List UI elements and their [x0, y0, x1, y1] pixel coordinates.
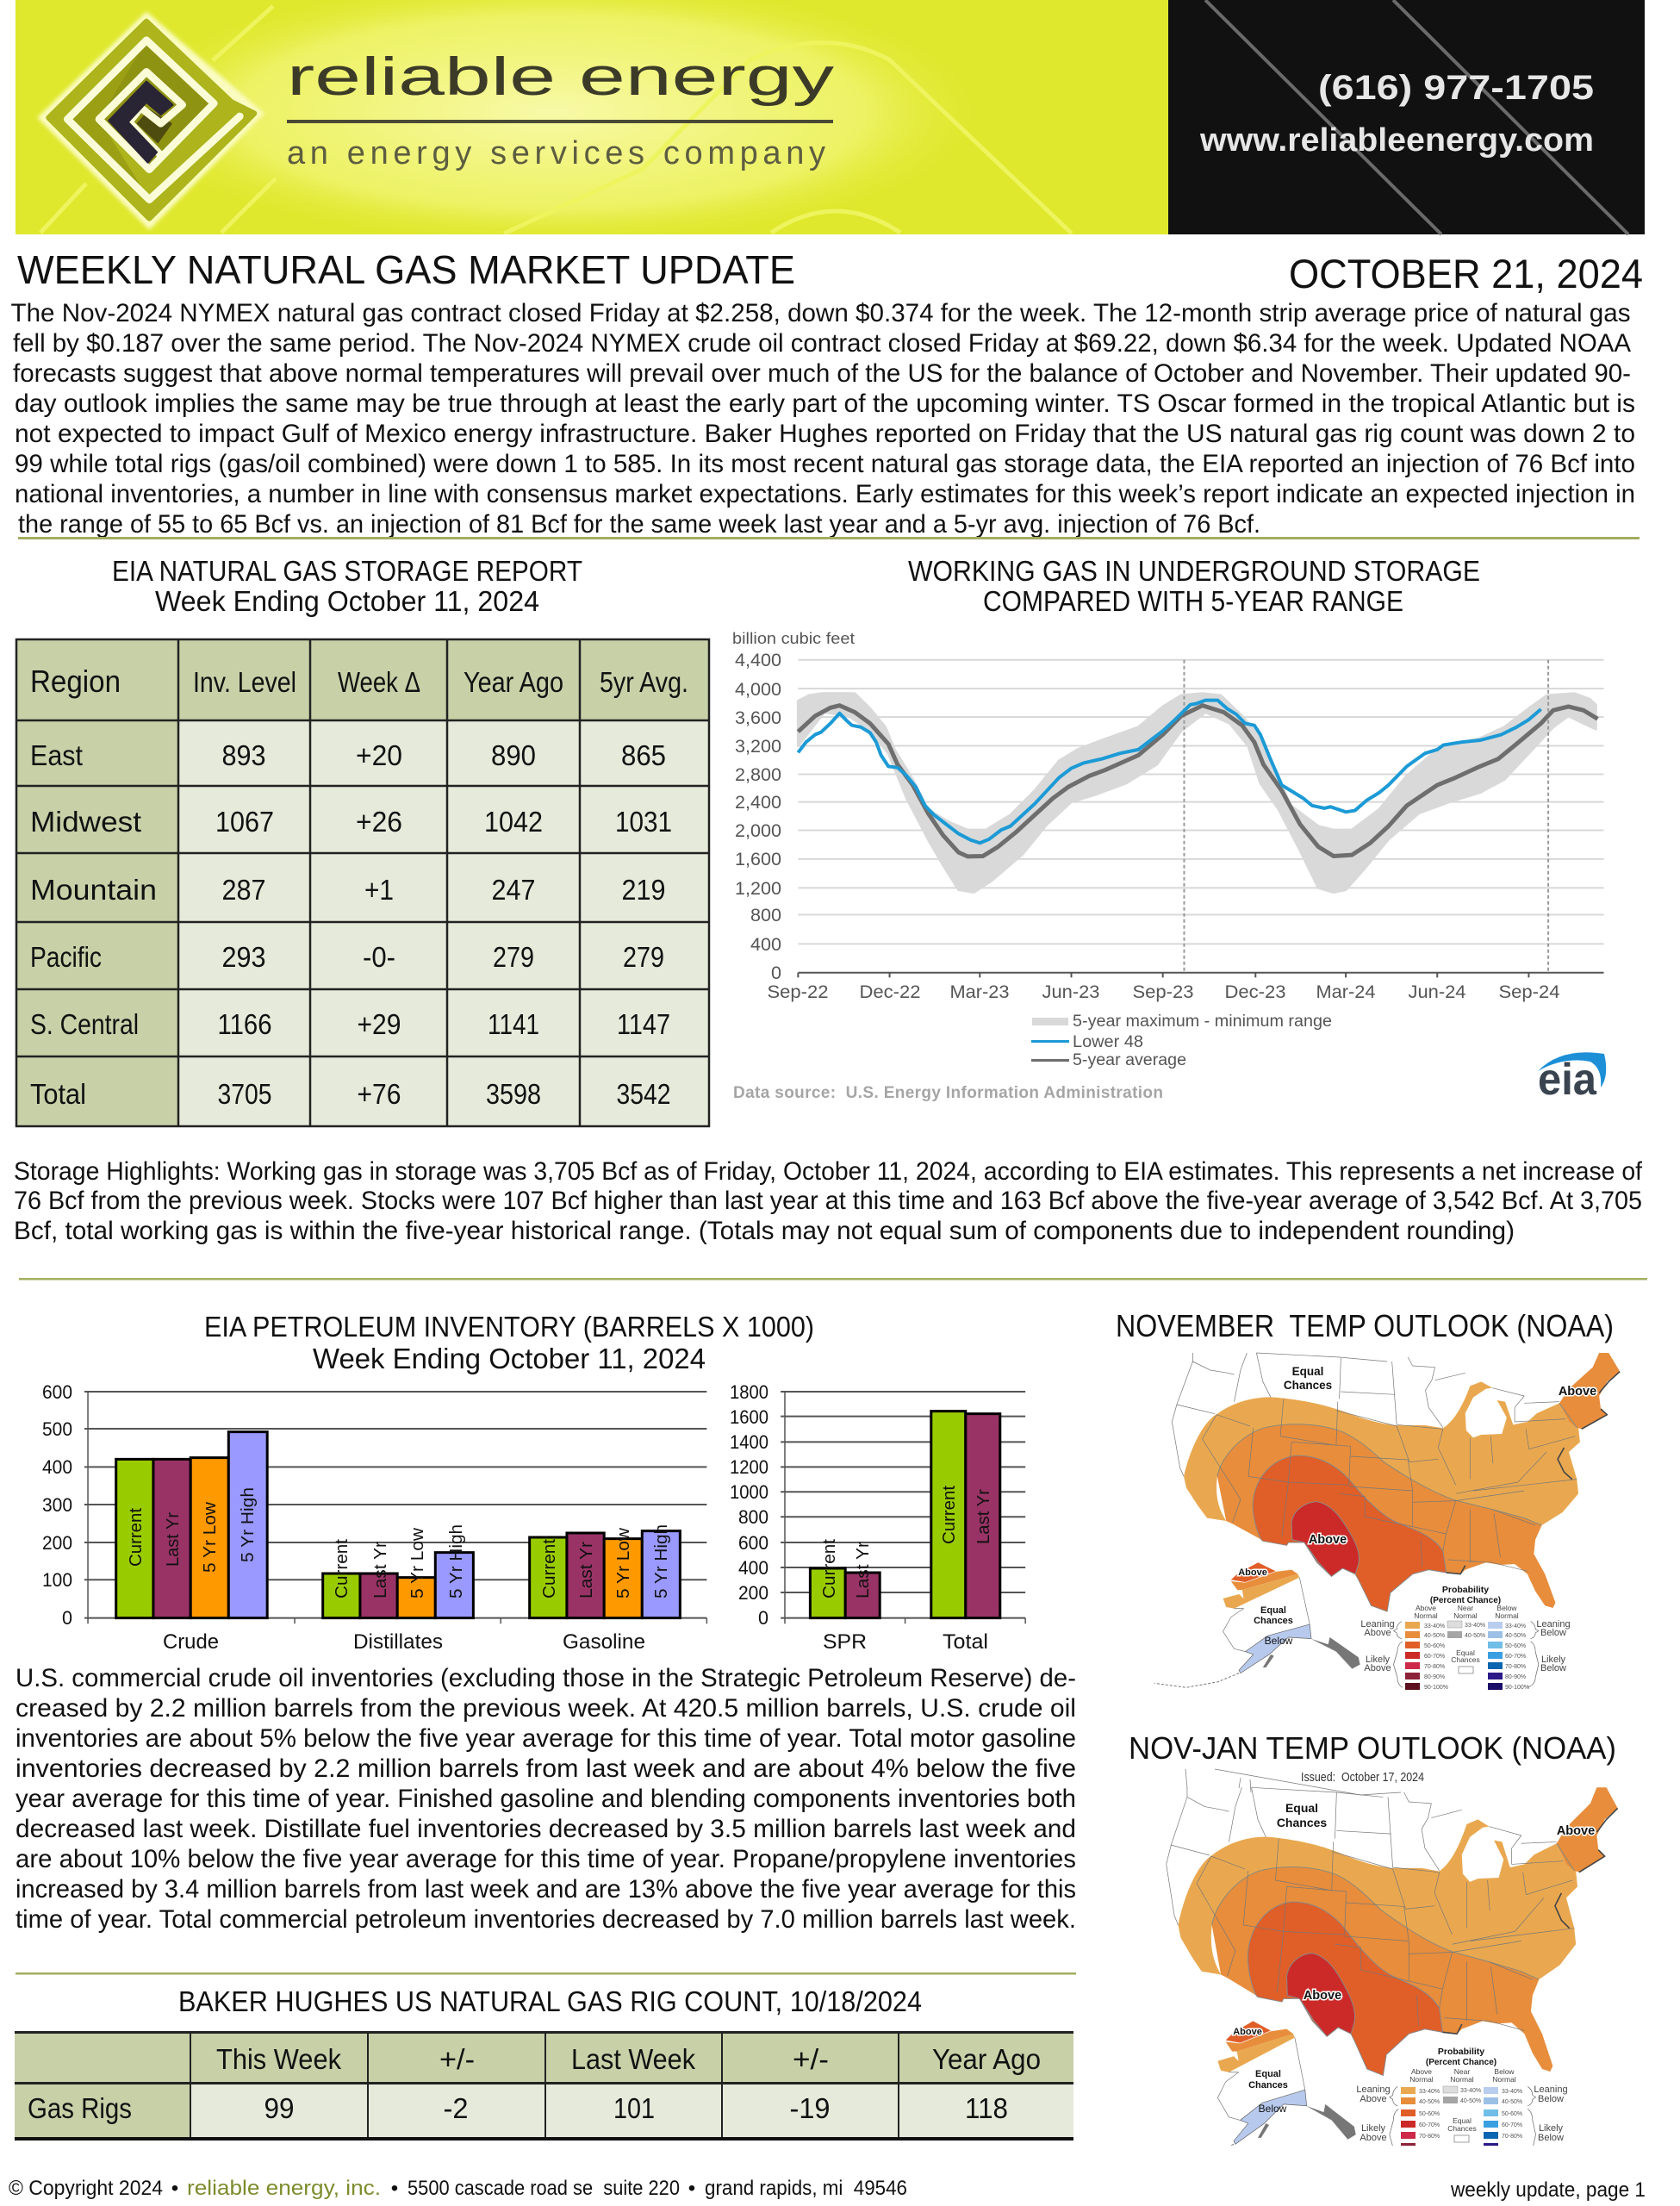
petroleum inventory heading: EIA PETROLEUM INVENTORY (BARRELS X 1000)	[204, 1311, 814, 1343]
map labels: Equal	[1255, 2069, 1281, 2079]
row: East: +20	[356, 739, 402, 771]
row: Pacific: -0-	[363, 941, 395, 973]
website: www.reliableenergy.com	[1199, 122, 1594, 159]
map legend: 50-60%	[1505, 1643, 1526, 1649]
chart x-axis labels: Jun-23	[1042, 982, 1099, 1002]
footer address line: •	[171, 2177, 178, 2200]
issue date: Issued: October 17, 2024	[1301, 1770, 1424, 1785]
petroleum commentary paragraph: creased by 2.2 million barrels from the previous week. At 420.5 million barrels, U.S. crude oil	[16, 1694, 1076, 1723]
market summary paragraph: 99 while total rigs (gas/oil combined) were down 1 to 585. In its most recent natural gas storage data, the EIA reported an injection of 76 Bcf into	[15, 450, 1635, 478]
map labels: Equal	[1260, 1605, 1286, 1616]
footer address line: 5500 cascade road se suite 220	[408, 2177, 680, 2200]
market summary paragraph: The Nov-2024 NYMEX natural gas contract closed Friday at $2.258, down $0.374 for the week. The 12-month strip average price of natural gas	[10, 299, 1630, 327]
chart y-axis unit: billion cubic feet	[732, 630, 855, 647]
chart legend: 5-year average	[1073, 1051, 1186, 1069]
rig count table	[15, 2031, 1073, 2141]
chart y-axis labels: 0	[771, 963, 781, 983]
map legend: 40-50%	[1465, 1633, 1485, 1639]
category labels: Crude	[163, 1630, 219, 1654]
chart y-axis labels: 1,200	[735, 879, 781, 899]
rotated bar labels: Current	[333, 1539, 352, 1598]
map legend: Normal	[1492, 2075, 1516, 2084]
map legend: Equal	[1453, 2116, 1472, 2125]
right chart y-axis labels: 600	[738, 1532, 768, 1554]
map legend: Normal	[1409, 2075, 1434, 2084]
chart legend: Lower 48	[1073, 1033, 1143, 1051]
left chart y-axis labels: 500	[42, 1418, 72, 1440]
rotated bar labels: Last Yr	[164, 1512, 183, 1567]
table header row: Year Ago	[464, 666, 563, 698]
table header row: Inv. Level	[193, 666, 296, 698]
map legend: 33-40%	[1465, 1623, 1485, 1629]
black contact panel	[1168, 0, 1645, 234]
rig table header: This Week	[216, 2043, 341, 2075]
yellow banner background	[16, 0, 1168, 234]
storage table	[16, 639, 709, 1126]
map legend: Likely	[1366, 1654, 1391, 1665]
row: Pacific	[30, 941, 664, 973]
map legend: 70-80%	[1424, 1664, 1445, 1670]
chart y-axis labels: 4,400	[735, 651, 781, 670]
main title: WEEKLY NATURAL GAS MARKET UPDATE	[17, 247, 795, 292]
map legend: 50-60%	[1424, 1643, 1445, 1649]
rotated bar labels: 5 Yr Low	[614, 1527, 633, 1598]
right chart y-axis labels: 1000	[730, 1481, 768, 1503]
storage highlights paragraph: 76 Bcf from the previous week. Stocks were 107 Bcf higher than last year at this time and 163 Bcf above the five-year average of 3,542 Bcf. At 3,705	[14, 1187, 1642, 1215]
map legend: Likely	[1361, 2123, 1386, 2134]
map legend: Probability	[1442, 1585, 1489, 1595]
row: Mountain: Mountain	[30, 874, 157, 906]
storage highlights paragraph	[14, 1157, 1643, 1245]
left chart y-axis labels: 400	[42, 1456, 72, 1478]
row: East: 893	[222, 739, 265, 771]
map legend: 33-40%	[1424, 1623, 1445, 1630]
November outlook map	[1154, 1353, 1620, 1691]
row: Total: 3705	[217, 1078, 272, 1110]
tagline: an energy services company	[287, 135, 825, 171]
right chart y-axis labels: 1800	[730, 1381, 768, 1403]
row: S. Central: 1141	[488, 1008, 539, 1040]
map labels: Chances	[1284, 1379, 1332, 1392]
left chart y-axis labels: 0	[62, 1607, 72, 1629]
rotated bar labels	[820, 1486, 993, 1598]
table header row: Region	[30, 664, 121, 699]
row: Mountain: 219	[622, 874, 665, 906]
map legend: Below	[1540, 1628, 1566, 1638]
map legend: Normal	[1453, 1611, 1478, 1620]
map legend: Below	[1496, 1604, 1517, 1612]
map legend: 70-80%	[1505, 1664, 1526, 1670]
left chart y-axis labels: 300	[42, 1494, 72, 1516]
map labels: Above	[1557, 1824, 1595, 1838]
chart y-axis labels	[735, 651, 781, 983]
distillates bars	[323, 1553, 473, 1618]
petroleum commentary paragraph: U.S. commercial crude oil inventories (excluding those in the Strategic Petroleum Reserve) de-	[16, 1664, 1076, 1692]
petroleum commentary paragraph	[16, 1664, 1076, 1934]
map legend: Probability	[1438, 2047, 1484, 2057]
row: Total: +76	[357, 1078, 401, 1110]
row: East	[30, 739, 666, 771]
row: Pacific: 279	[623, 941, 664, 973]
chart y-axis labels: 4,000	[735, 680, 781, 700]
row: Midwest: 1042	[484, 806, 543, 838]
rig table data row: 101	[613, 2092, 655, 2124]
map legend: 50-60%	[1502, 2111, 1522, 2117]
chart x-axis labels: Dec-22	[860, 982, 920, 1002]
row: Total	[30, 1078, 670, 1110]
storage highlights paragraph: Bcf, total working gas is within the five-year historical range. (Totals may not equal sum of components due to independent rounding)	[14, 1217, 1515, 1245]
chart y-axis labels: 1,600	[735, 850, 781, 869]
category labels: Distillates	[353, 1630, 443, 1654]
left chart y-axis labels	[42, 1381, 72, 1629]
rotated bar labels: Last Yr	[577, 1542, 596, 1598]
map legend: 50-60%	[1419, 2111, 1440, 2117]
gasoline bars	[530, 1531, 680, 1618]
map legend: Near	[1454, 2067, 1470, 2076]
right chart y-axis labels: 200	[738, 1582, 768, 1604]
map legend: Likely	[1541, 1654, 1566, 1665]
rig table header	[216, 2043, 1041, 2075]
rotated bar labels: Last Yr	[974, 1489, 993, 1544]
petroleum commentary paragraph: inventories decreased by 2.2 million barrels from last week and are about 4% below the five	[16, 1754, 1076, 1783]
row: Pacific: Pacific	[30, 941, 102, 973]
footer address line	[9, 2177, 907, 2200]
category labels: Gasoline	[563, 1630, 645, 1654]
market summary paragraph: the range of 55 to 65 Bcf vs. an injection of 81 Bcf for the same week last year and a 5-yr avg. injection of 76 Bcf.	[18, 510, 1260, 539]
map legend: Above	[1416, 1604, 1436, 1612]
left chart y-axis labels: 600	[42, 1381, 72, 1403]
map legend: 70-80%	[1502, 2134, 1522, 2140]
working gas chart heading	[908, 555, 1480, 617]
map legend: 40-50%	[1419, 2099, 1440, 2105]
map legend: Above	[1364, 1663, 1391, 1673]
map legend	[1360, 1585, 1571, 1691]
Nov-Jan outlook map	[1148, 1769, 1618, 2160]
map legend: Leaning	[1356, 2084, 1391, 2095]
map labels: Above	[1238, 1567, 1267, 1578]
right chart y-axis labels	[730, 1381, 768, 1629]
icon: eia logo: eia	[1538, 1055, 1597, 1105]
row: Midwest: Midwest	[30, 806, 141, 838]
left chart y-axis labels: 100	[42, 1569, 72, 1591]
map legend: 33-40%	[1502, 2089, 1522, 2095]
banner glow	[40, 0, 1072, 250]
chart y-axis labels: 2,400	[735, 793, 781, 813]
row: S. Central: 1147	[617, 1008, 670, 1040]
petroleum bar chart: crude, distillates, gasoline	[42, 1381, 706, 1654]
table header row: 5yr Avg.	[600, 666, 688, 698]
right chart y-axis labels: 800	[738, 1506, 768, 1528]
map labels: Above	[1304, 1989, 1341, 2003]
map legend: 40-50%	[1424, 1633, 1445, 1639]
map legend: Above	[1360, 2094, 1387, 2104]
rotated bar labels	[127, 1487, 671, 1598]
rig count heading: BAKER HUGHES US NATURAL GAS RIG COUNT, 10/18/2024	[178, 1985, 922, 2017]
Nov-Jan outlook heading: NOV-JAN TEMP OUTLOOK (NOAA)	[1129, 1730, 1616, 1766]
map legend: Leaning	[1536, 1619, 1571, 1630]
map legend: 33-40%	[1460, 2088, 1481, 2094]
map legend: 90-100%	[1505, 1685, 1529, 1691]
footer address line: © Copyright 2024	[9, 2177, 163, 2200]
page number: weekly update, page 1	[1450, 2178, 1646, 2202]
right chart y-axis labels: 0	[758, 1607, 768, 1629]
chart y-axis labels: 2,000	[735, 821, 781, 841]
chart y-axis labels: 800	[750, 906, 781, 925]
footer address line: grand rapids, mi 49546	[705, 2177, 907, 2200]
row: Mountain: 287	[222, 874, 265, 906]
storage report heading: EIA NATURAL GAS STORAGE REPORT	[112, 555, 582, 587]
storage report heading: Week Ending October 11, 2024	[155, 585, 539, 617]
phone number: (616) 977-1705	[1318, 69, 1594, 107]
map legend: Leaning	[1360, 1619, 1395, 1630]
rig table header: +/-	[439, 2043, 475, 2075]
map legend: 33-40%	[1419, 2089, 1440, 2095]
petroleum commentary paragraph: decreased last week. Distillate fuel inventories decreased by 3.5 million barrels last week and	[16, 1815, 1076, 1843]
storage report heading	[112, 555, 582, 617]
rig table header: Year Ago	[932, 2043, 1041, 2075]
row: Midwest: +26	[356, 806, 402, 838]
date: OCTOBER 21, 2024	[1289, 251, 1643, 296]
rotated bar labels: 5 Yr Low	[408, 1527, 427, 1598]
chart x-axis labels	[767, 982, 1560, 1002]
row: East: 890	[491, 739, 536, 771]
map shapes	[1154, 1353, 1620, 1687]
petroleum commentary paragraph: year average for this time of year. Finished gasoline and blending components inventories both	[16, 1785, 1076, 1813]
row: Midwest	[30, 806, 672, 838]
right chart y-axis labels: 1600	[730, 1406, 768, 1428]
map legend: 60-70%	[1419, 2122, 1440, 2128]
row: Midwest: 1031	[615, 806, 672, 838]
logo spiral diamond	[37, 11, 264, 230]
petroleum commentary paragraph: are about 10% below the five year average for this time of year. Propane/propylene inventories	[16, 1845, 1076, 1873]
map legend: 80-90%	[1505, 1674, 1526, 1680]
petroleum commentary paragraph: inventories are about 5% below the five year average for this time of year. Total motor gasoline	[16, 1724, 1076, 1753]
rotated bar labels: Current	[127, 1508, 146, 1567]
row: East: 865	[621, 739, 666, 771]
petroleum inventory heading: Week Ending October 11, 2024	[313, 1343, 706, 1374]
map legend: Above	[1364, 1628, 1391, 1638]
map legend: Above	[1411, 2067, 1432, 2076]
category labels	[823, 1630, 988, 1654]
working gas line chart	[732, 630, 1606, 1105]
rig table data row: 99	[264, 2092, 295, 2124]
map legend: Chances	[1447, 2124, 1477, 2133]
chart plot area	[798, 660, 1603, 977]
brand name: reliable energy	[287, 47, 834, 107]
row: Mountain	[30, 874, 665, 906]
map legend: Below	[1540, 1663, 1566, 1673]
map legend: Near	[1458, 1604, 1473, 1612]
row: Mountain: +1	[364, 874, 394, 906]
market summary paragraph: not expected to impact Gulf of Mexico energy infrastructure. Baker Hughes reported on Friday that the US natural gas rig count was down 2 to	[15, 420, 1635, 448]
map legend: 70-80%	[1419, 2134, 1440, 2140]
map labels: Above	[1559, 1385, 1596, 1399]
petroleum commentary paragraph: time of year. Total commercial petroleum inventories decreased by 7.0 million barrels last week.	[16, 1905, 1076, 1934]
row: S. Central: S. Central	[30, 1008, 139, 1040]
row: S. Central: 1166	[217, 1008, 272, 1040]
map legend: 80-90%	[1424, 1674, 1445, 1680]
petroleum bar chart: SPR and total	[730, 1381, 1025, 1654]
rotated bar labels: 5 Yr High	[447, 1524, 466, 1598]
chart y-axis labels: 3,600	[735, 708, 781, 728]
rig table data row: -19	[789, 2092, 831, 2124]
row: S. Central: +29	[357, 1008, 401, 1040]
chart x-axis labels: Mar-24	[1316, 982, 1376, 1002]
map labels: Equal	[1292, 1365, 1323, 1378]
map legend: 60-70%	[1505, 1654, 1526, 1660]
map labels: Equal	[1285, 1801, 1318, 1815]
working gas chart heading: COMPARED WITH 5-YEAR RANGE	[983, 585, 1403, 617]
rig table data row	[28, 2092, 1008, 2124]
rig table data row: -2	[443, 2092, 469, 2124]
rotated bar labels: Current	[940, 1486, 959, 1544]
market summary paragraph: forecasts suggest that above normal temperatures will prevail over much of the US for the balance of October and November. Their updated 90-	[13, 359, 1631, 388]
map legend: Equal	[1456, 1648, 1475, 1657]
footer address line: reliable energy, inc.	[187, 2177, 381, 2200]
map labels: Chances	[1248, 2080, 1288, 2091]
table header row: Week Δ	[338, 666, 420, 698]
rotated bar labels: Last Yr	[371, 1542, 390, 1598]
map labels: Chances	[1254, 1616, 1293, 1626]
map legend: Normal	[1414, 1611, 1438, 1620]
map legend: Below	[1538, 2094, 1564, 2104]
category labels: SPR	[823, 1630, 867, 1654]
row: Total: Total	[30, 1078, 86, 1110]
map legend: 40-50%	[1502, 2099, 1522, 2105]
chart x-axis labels: Sep-24	[1499, 982, 1560, 1002]
right chart y-axis labels: 1400	[730, 1431, 768, 1453]
map legend: 60-70%	[1424, 1654, 1445, 1660]
petroleum commentary paragraph: increased by 3.4 million barrels from last week and are 13% above the five year average for this	[16, 1875, 1076, 1904]
rotated bar labels: Last Yr	[854, 1542, 873, 1598]
map legend: Likely	[1539, 2123, 1564, 2134]
map legend: Normal	[1495, 1611, 1519, 1620]
header banner	[16, 0, 1645, 250]
chart x-axis labels: Sep-23	[1132, 982, 1194, 1002]
rotated bar labels: 5 Yr High	[239, 1487, 258, 1562]
map legend: Below	[1538, 2133, 1564, 2143]
row: Mountain: 247	[491, 874, 536, 906]
right chart y-axis labels: 1200	[730, 1456, 768, 1478]
map legend: (Percent Chance)	[1430, 1596, 1501, 1605]
category labels: Total	[943, 1630, 988, 1654]
map labels: Above	[1309, 1533, 1347, 1547]
row: Midwest: 1067	[215, 806, 274, 838]
rotated bar labels: 5 Yr High	[652, 1524, 671, 1598]
crude bars	[116, 1432, 267, 1618]
market summary paragraph	[10, 299, 1635, 539]
Lower 48 line	[798, 701, 1541, 843]
map shapes	[1148, 1787, 1618, 2160]
map labels	[1238, 1365, 1596, 1647]
map legend	[1356, 2047, 1568, 2150]
rig table data row: 118	[965, 2092, 1008, 2124]
map legend: 40-50%	[1505, 1633, 1526, 1639]
market summary paragraph: fell by $0.187 over the same period. The Nov-2024 NYMEX crude oil contract closed Friday at $69.22, down $6.34 for the week. Updated NOAA	[13, 329, 1631, 358]
market summary paragraph: day outlook implies the same may be true through at least the early part of the upcoming winter. TS Oscar formed in the tropical Atlantic but is	[15, 389, 1635, 418]
map legend: (Percent Chance)	[1426, 2058, 1496, 2067]
5-year range band	[798, 694, 1596, 893]
data source note: Data source: U.S. Energy Information Administration	[733, 1084, 1163, 1102]
chart y-axis labels: 2,800	[735, 765, 781, 785]
petroleum inventory heading	[204, 1311, 814, 1374]
map legend: Normal	[1450, 2075, 1474, 2084]
chart legend	[1031, 1013, 1332, 1069]
map legend: 90-100%	[1424, 1685, 1448, 1691]
chart y-axis labels: 400	[750, 935, 781, 955]
map legend: Above	[1360, 2133, 1387, 2143]
November outlook heading: NOVEMBER TEMP OUTLOOK (NOAA)	[1116, 1308, 1614, 1343]
row: East: East	[30, 739, 83, 771]
footer address line: •	[391, 2177, 398, 2200]
rig table data row: Gas Rigs	[28, 2092, 132, 2124]
market summary paragraph: national inventories, a number in line with consensus market expectations. Early estimates for this week’s report indicate an expected injection in	[15, 480, 1635, 508]
map legend: Below	[1494, 2067, 1515, 2076]
chart x-axis labels: Mar-23	[949, 982, 1010, 1002]
left chart y-axis labels: 200	[42, 1532, 72, 1554]
footer address line: •	[688, 2177, 695, 2200]
5-year average line	[798, 706, 1597, 857]
rotated bar labels: Current	[820, 1539, 839, 1598]
map legend: Leaning	[1534, 2084, 1568, 2095]
chart x-axis labels: Jun-24	[1408, 982, 1466, 1002]
row: Pacific: 293	[222, 941, 265, 973]
chart legend: 5-year maximum - minimum range	[1073, 1013, 1332, 1031]
map legend: 33-40%	[1505, 1623, 1526, 1630]
row: Pacific: 279	[493, 941, 534, 973]
category labels	[163, 1630, 645, 1654]
chart x-axis labels: Dec-23	[1225, 982, 1285, 1002]
map legend: 40-50%	[1460, 2098, 1481, 2104]
chart x-axis labels: Sep-22	[767, 982, 829, 1002]
map legend: 60-70%	[1502, 2122, 1522, 2128]
map labels: Above	[1233, 2027, 1262, 2037]
chart y-axis labels: 3,200	[735, 737, 781, 757]
rig table header: Last Week	[571, 2043, 695, 2075]
rotated bar labels: 5 Yr Low	[201, 1501, 220, 1573]
map labels: Below	[1259, 2103, 1287, 2115]
working gas chart heading: WORKING GAS IN UNDERGROUND STORAGE	[908, 555, 1480, 587]
row: Total: 3542	[617, 1078, 670, 1110]
row: S. Central	[30, 1008, 670, 1040]
rig table header: +/-	[793, 2043, 829, 2075]
row: Total: 3598	[486, 1078, 541, 1110]
rotated bar labels: Current	[540, 1539, 559, 1598]
map labels	[1233, 1801, 1595, 2115]
map labels: Chances	[1277, 1816, 1327, 1829]
map legend: Chances	[1451, 1655, 1480, 1664]
right chart y-axis labels: 400	[738, 1557, 768, 1579]
map labels: Below	[1265, 1635, 1293, 1647]
table header row	[30, 664, 688, 699]
